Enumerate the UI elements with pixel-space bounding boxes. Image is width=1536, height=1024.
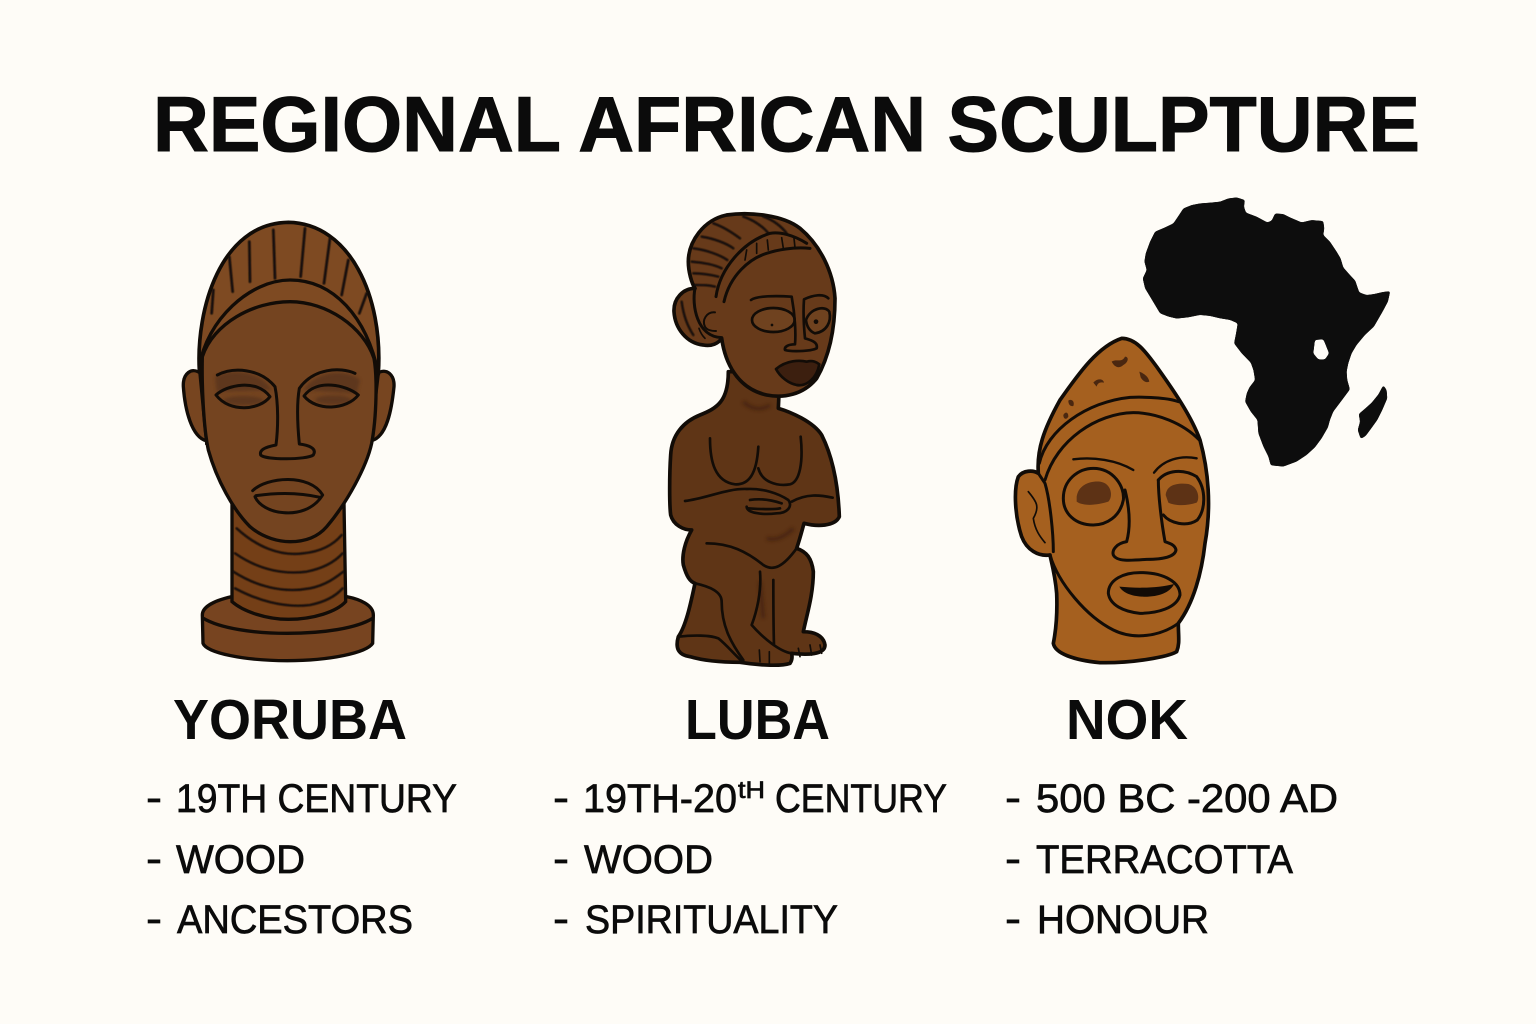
Luba facts: tH <box>738 777 765 804</box>
Yoruba headband and face <box>199 280 378 542</box>
Luba heading: LUBA <box>685 688 830 752</box>
Yoruba facts: - <box>146 837 162 881</box>
Luba facts: - <box>553 897 569 941</box>
Luba facts: CENTURY <box>775 777 947 821</box>
sculpture: Nok terracotta head <box>1015 338 1209 663</box>
Yoruba hair cap <box>199 222 379 373</box>
Luba body shading <box>743 402 793 618</box>
column: Yoruba <box>146 688 457 942</box>
title: REGIONAL AFRICAN SCULPTURE <box>153 80 1420 168</box>
Nok head details <box>1028 397 1204 636</box>
Luba mouth <box>776 361 819 385</box>
column: Luba <box>553 688 947 942</box>
Luba facts <box>553 776 947 942</box>
sculpture: Yoruba head <box>183 222 394 661</box>
sculpture: Luba seated figure <box>670 214 839 665</box>
Yoruba facts: - <box>146 897 162 941</box>
Luba facts: - <box>553 776 569 820</box>
Nok facts: - <box>1005 776 1021 820</box>
column: Nok <box>1005 688 1338 942</box>
Luba facts: 19TH-20 <box>583 777 737 821</box>
Luba body <box>670 372 839 665</box>
Nok facts: TERRACOTTA <box>1036 838 1293 882</box>
Yoruba base <box>202 597 373 661</box>
Nok facts: - <box>1005 897 1021 941</box>
Yoruba ears <box>183 371 394 441</box>
Yoruba eye shadows <box>215 372 360 405</box>
Nok heading: NOK <box>1066 688 1188 752</box>
Luba hair grooves <box>682 217 787 335</box>
Yoruba heading: YORUBA <box>173 688 407 752</box>
Yoruba facts <box>146 776 457 942</box>
Africa mainland with lake <box>1143 197 1390 467</box>
Yoruba facts: 19TH CENTURY <box>176 777 457 821</box>
Yoruba facts: - <box>146 776 162 820</box>
Nok mouth opening <box>1119 584 1174 597</box>
Luba body lines <box>678 437 833 664</box>
Luba facts: SPIRITUALITY <box>585 898 838 942</box>
Nok eyes <box>1077 482 1198 505</box>
Yoruba facts: ANCESTORS <box>177 898 413 942</box>
Madagascar <box>1358 385 1387 439</box>
Nok facts: 500 BC -200 AD <box>1036 777 1338 821</box>
Luba head and hair <box>674 214 835 396</box>
Luba headband <box>694 233 810 338</box>
Nok facts: - <box>1005 837 1021 881</box>
Nok head silhouette <box>1015 338 1209 663</box>
Nok facts <box>1005 776 1338 942</box>
Luba facts: WOOD <box>584 838 713 882</box>
Luba facts: - <box>553 837 569 881</box>
Luba face <box>751 295 830 385</box>
Yoruba neck <box>232 503 346 619</box>
map of Africa <box>1143 197 1390 467</box>
Yoruba facial features <box>216 370 358 513</box>
Yoruba facts: WOOD <box>176 838 305 882</box>
Nok facts: HONOUR <box>1037 898 1209 942</box>
Nok scalp marks <box>1063 357 1149 419</box>
